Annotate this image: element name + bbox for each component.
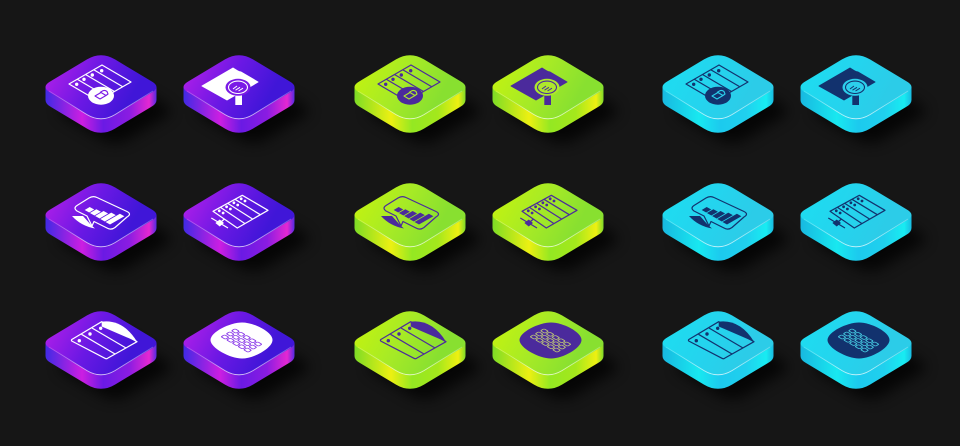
tile: cyan document search <box>800 55 926 143</box>
panel: green icon set <box>354 55 618 399</box>
tile: cyan server network node <box>800 183 926 271</box>
tile: cyan chat bar chart <box>662 183 788 271</box>
panel: cyan icon set <box>662 55 926 399</box>
tile: purple server with lock <box>46 55 170 143</box>
tile: cyan binary code <box>800 311 926 399</box>
tile: green chat bar chart <box>354 183 480 271</box>
tile: purple chat bar chart <box>46 183 170 271</box>
tile: green server network node <box>492 183 618 271</box>
tile: green document search <box>492 55 618 143</box>
tile: green binary code <box>492 311 618 399</box>
panel: purple icon set <box>46 55 308 399</box>
tile: cyan server with lock <box>662 55 788 143</box>
tile: purple document search <box>184 55 308 143</box>
tile: purple server network node <box>184 183 308 271</box>
tile: green server rack <box>354 311 480 399</box>
tile: purple binary code <box>184 311 308 399</box>
tile: purple server rack <box>46 311 170 399</box>
tile: cyan server rack <box>662 311 788 399</box>
tile: green server with lock <box>354 55 480 143</box>
